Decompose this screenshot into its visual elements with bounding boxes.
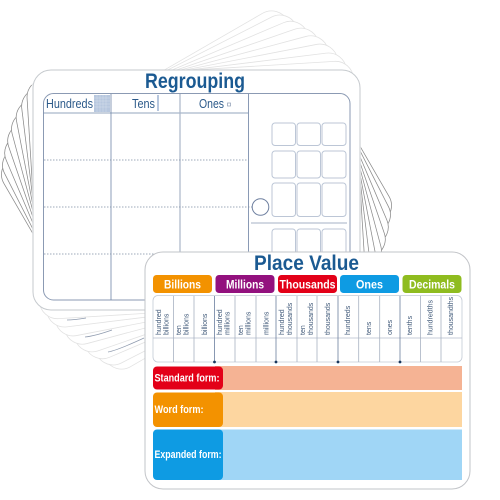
place value table [153, 296, 462, 363]
icon: circle marker [252, 199, 269, 215]
column heading: Hundreds: Hundreds [46, 96, 93, 111]
digit boxes [272, 123, 346, 259]
column labels: hundreds [345, 305, 352, 335]
column labels: hundred [279, 309, 286, 335]
header: Billions [153, 275, 212, 293]
column labels: ten [300, 325, 307, 335]
column labels: billions [184, 313, 190, 335]
column labels: thousands [287, 302, 294, 335]
column labels: thousands [308, 302, 315, 335]
column labels: ten [238, 325, 245, 335]
column labels [156, 296, 455, 335]
column labels: ten [176, 325, 183, 335]
column labels: hundredths [428, 299, 434, 335]
column labels: billions [202, 313, 209, 335]
header: Thousands [278, 275, 337, 293]
panel: Place Value board [145, 252, 470, 489]
icon: hundreds block [94, 95, 110, 112]
regrouping table frame [44, 94, 350, 300]
header: Millions: Millions [226, 280, 264, 292]
column heading: Tens: Tens [132, 96, 155, 111]
row: Standard form [153, 366, 462, 390]
header: Thousands: Thousands [280, 280, 336, 292]
column labels: millions [246, 311, 252, 335]
header: Decimals: Decimals [409, 280, 455, 292]
column labels: thousandths [448, 296, 455, 335]
column labels: millions [264, 311, 270, 335]
row: Standard form: Standard form: [154, 372, 220, 384]
heading: Regrouping: Regrouping [145, 70, 245, 93]
column labels: hundred [156, 309, 163, 335]
header: Ones: Ones [356, 280, 383, 292]
row: Expanded form: Expanded form: [154, 449, 222, 461]
heading: Place Value: Place Value [254, 252, 359, 275]
column labels: ones [387, 319, 394, 335]
column labels: millions [224, 311, 232, 335]
header: Ones [340, 275, 399, 293]
column heading: Ones: Ones [199, 96, 224, 111]
icon: ones cube [228, 103, 230, 106]
column labels: tenths [407, 315, 414, 335]
header: Decimals [402, 275, 462, 293]
row: Expanded form [153, 430, 462, 480]
header: Billions: Billions [164, 280, 201, 292]
stack of fanned boards [0, 4, 398, 376]
row: Word form [153, 392, 462, 427]
header: Millions [216, 275, 274, 293]
column labels: hundred [217, 309, 224, 335]
column labels: billions [164, 313, 170, 335]
column labels: tens [366, 321, 373, 335]
panel: Regrouping board [33, 70, 360, 310]
row: Word form: Word form: [154, 404, 204, 416]
column labels: thousands [325, 302, 332, 335]
icon: tens rod [157, 95, 159, 111]
